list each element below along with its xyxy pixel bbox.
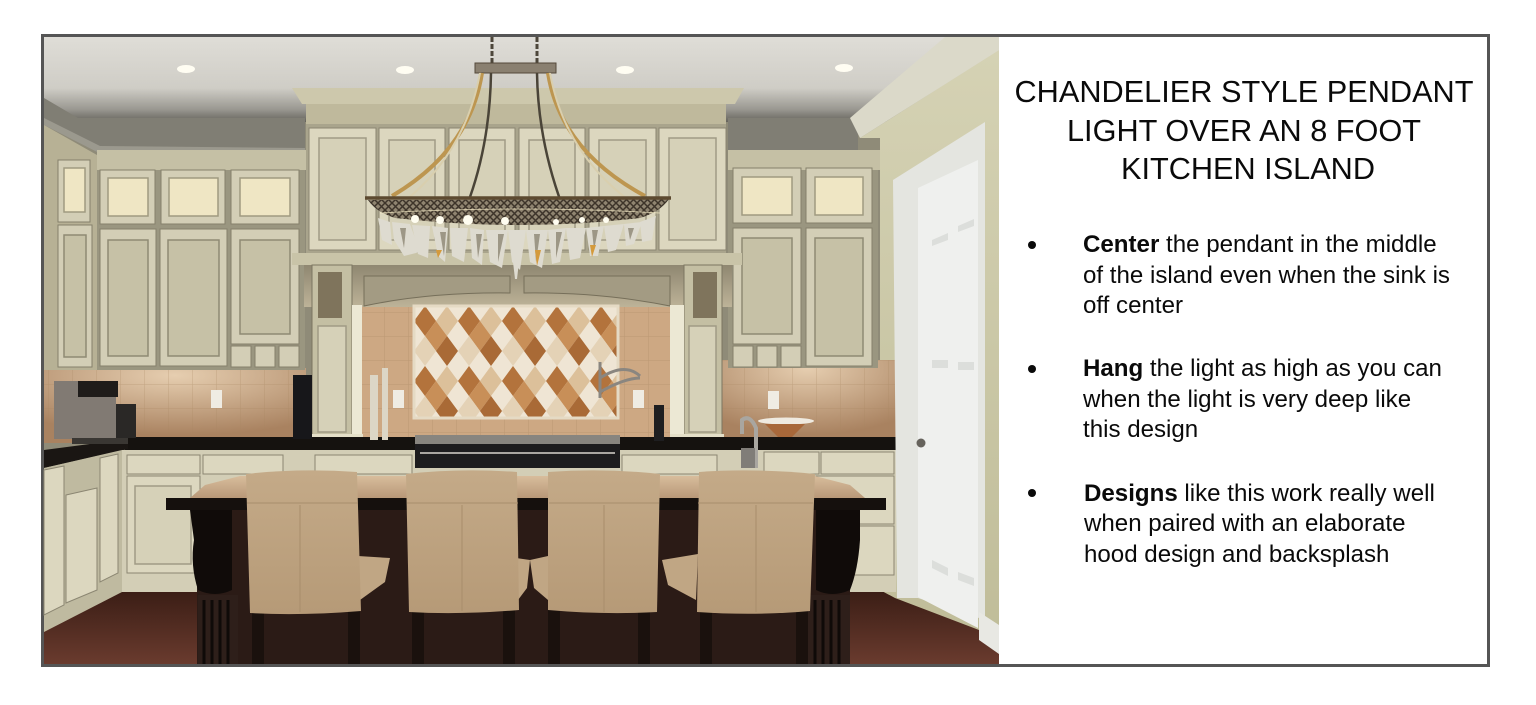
island fluted leg left (198, 595, 238, 664)
faucet (741, 418, 756, 468)
island (166, 476, 886, 664)
bullet: designs: Designs like this work really well (1084, 480, 1435, 507)
pot filler (600, 362, 640, 398)
crown moulding (44, 98, 858, 152)
bullet: designs (1028, 480, 1435, 568)
island corbel left (190, 510, 232, 594)
heading: CHANDELIER STYLE PENDANT (1014, 74, 1474, 109)
bullet: designs: hood design and backsplash (1084, 541, 1389, 568)
soda machine (293, 375, 312, 439)
backsplash right (718, 360, 896, 443)
heading (1014, 74, 1474, 186)
outlets (211, 390, 779, 409)
recessed ceiling lights (177, 64, 853, 74)
heading: KITCHEN ISLAND (1121, 151, 1375, 186)
bullet: hang: this design (1083, 416, 1198, 443)
backsplash left (44, 368, 306, 443)
tile grid (44, 300, 896, 443)
range cooktop (415, 435, 620, 468)
bullet: hang (1028, 355, 1442, 443)
island fluted leg right (808, 595, 850, 664)
backsplash center (350, 300, 690, 440)
ceiling (44, 37, 999, 122)
lower cabinets (44, 450, 896, 632)
center cabinets and hood (292, 88, 744, 444)
right upper cabinets (728, 150, 880, 368)
right wall (860, 50, 999, 664)
island corbel right (816, 510, 860, 594)
backsplash diamond panel (414, 306, 618, 418)
bullet: center: of the island even when the sink is (1083, 262, 1450, 289)
coffee machine (54, 381, 136, 444)
countertop: left return (44, 439, 128, 468)
left upper cabinets (44, 125, 307, 370)
chandelier (365, 37, 671, 279)
bullet: designs: when paired with an elaborate (1083, 510, 1405, 537)
bullet: center: Center the pendant in the middle (1083, 231, 1437, 258)
bullet: hang: Hang the light as high as you can (1083, 355, 1442, 382)
door frame and door (893, 122, 999, 654)
decorative bowl (758, 418, 814, 437)
floor (44, 590, 999, 664)
panel: text (1014, 74, 1474, 568)
countertop (125, 437, 896, 450)
heading: LIGHT OVER AN 8 FOOT (1067, 113, 1421, 148)
bullet: center: off center (1083, 292, 1183, 319)
bullet: hang: when the light is very deep like (1082, 386, 1411, 413)
faucet base accessory (654, 405, 664, 441)
photo: kitchen with chandelier over island (44, 37, 999, 664)
candle holders (370, 368, 388, 440)
bullet: center (1028, 231, 1450, 319)
bar stools (246, 470, 815, 664)
photo base fill (44, 37, 999, 664)
crown moulding: right (850, 37, 999, 138)
